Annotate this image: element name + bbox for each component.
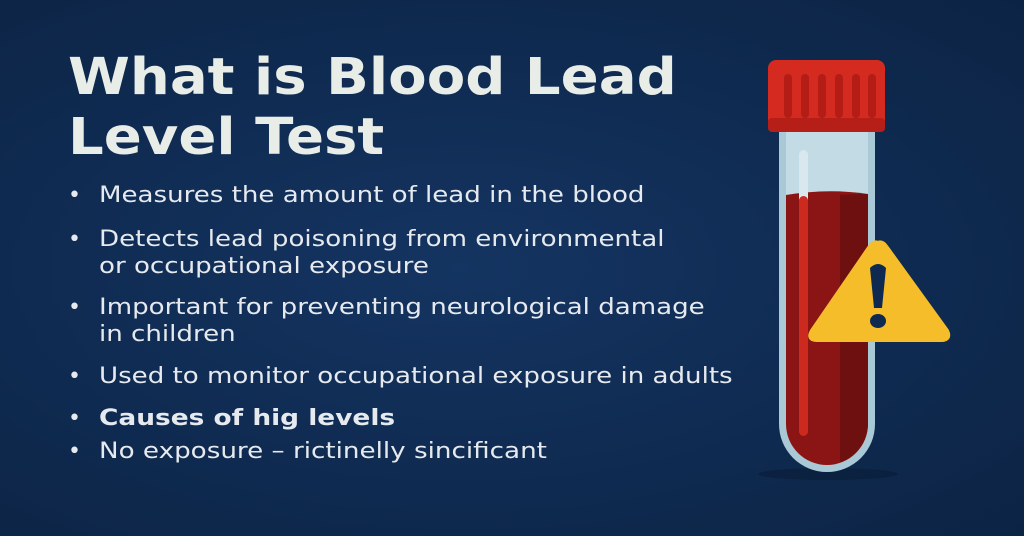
bullet 5: • xyxy=(68,406,81,431)
tube glass xyxy=(779,128,875,472)
bullet 4: Used to monitor occupational exposure in adults xyxy=(99,364,733,389)
title: Level Test xyxy=(68,108,384,167)
bullet 6: No exposure – rictinelly sincificant xyxy=(99,439,547,464)
bullet list xyxy=(68,183,733,464)
bullet 3: in children xyxy=(99,322,236,347)
title xyxy=(68,48,677,167)
bullet 3 xyxy=(68,295,705,347)
warning icon xyxy=(811,244,947,339)
bullet 5: Causes of hig levels xyxy=(99,406,395,431)
blood xyxy=(786,191,868,465)
bullet 2: or occupational exposure xyxy=(99,254,429,279)
title: What is Blood Lead xyxy=(68,48,677,107)
bullet 1: Measures the amount of lead in the blood xyxy=(99,183,644,208)
bullet 1: • xyxy=(68,183,81,208)
bullet 2: Detects lead poisoning from environmental xyxy=(99,227,665,252)
bullet 4: • xyxy=(68,364,81,389)
bullet 3: Important for preventing neurological damage xyxy=(99,295,705,320)
bullet 2 xyxy=(68,227,665,279)
bullet 2: • xyxy=(68,227,81,252)
bullet 3: • xyxy=(68,295,81,320)
cap xyxy=(768,60,885,132)
bullet 6: • xyxy=(68,439,81,464)
